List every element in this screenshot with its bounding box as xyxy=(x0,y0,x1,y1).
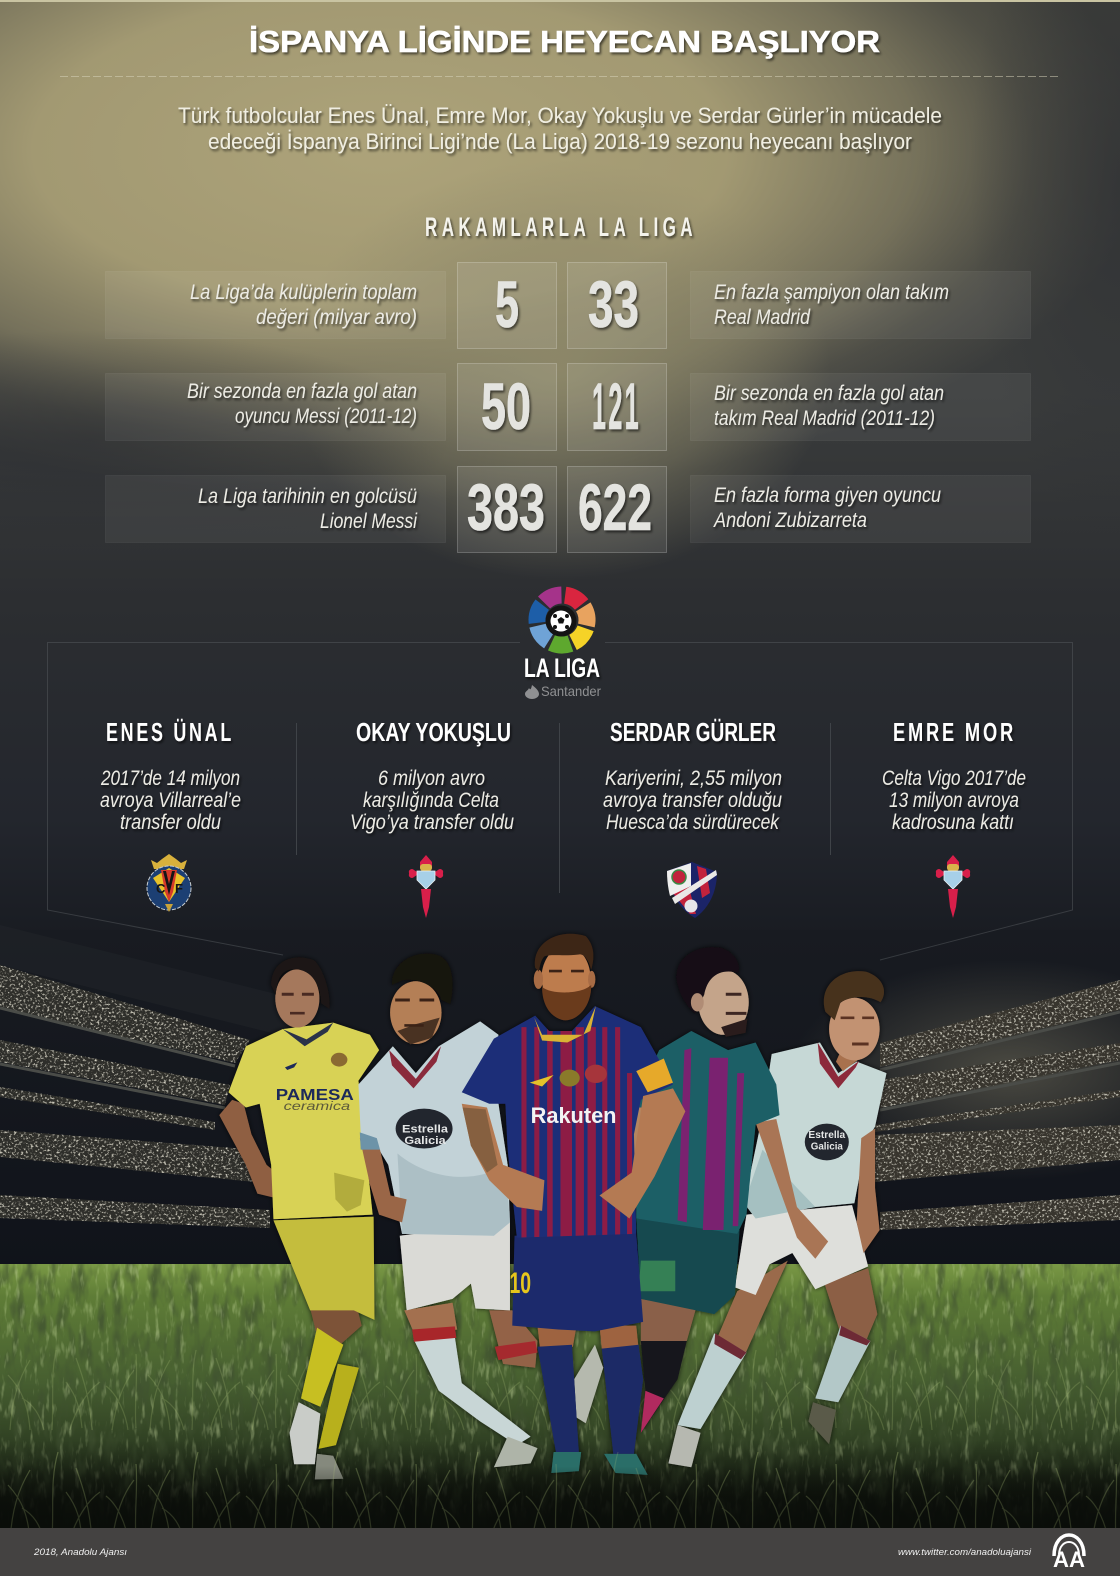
stat: top scorer and appearances: Andoni Zubizarreta xyxy=(712,508,867,532)
footer credit: 2018, Anadolu Ajansı xyxy=(33,1547,127,1558)
player: Okay Yokuşlu xyxy=(358,954,538,1467)
player column: Enes Ünal xyxy=(100,717,241,834)
player column: Serdar Gürler xyxy=(603,717,782,834)
crowd stands right xyxy=(875,980,1120,1230)
player column: Serdar Gürler: Huesca’da sürdürecek xyxy=(606,810,780,834)
player: Okay Yokuşlu: Estrella xyxy=(402,1122,449,1135)
players illustration xyxy=(219,934,887,1480)
player: Enes Ünal: ceramica xyxy=(284,1099,351,1113)
footer bar xyxy=(0,1528,1120,1576)
player column: Okay Yokuşlu: karşılığında Celta xyxy=(363,788,499,812)
player: Lionel Messi xyxy=(462,934,685,1475)
player: Serdar Gürler xyxy=(574,947,780,1433)
section heading: numbers: RAKAMLARLA LA LIGA xyxy=(425,212,697,242)
player: Enes Ünal xyxy=(219,957,379,1480)
stats row 3 xyxy=(106,466,1030,552)
grass field xyxy=(0,1264,1120,1528)
player column: Okay Yokuşlu xyxy=(350,717,514,834)
stat: club value: değeri (milyar avro) xyxy=(256,305,417,329)
player column: Emre Mor xyxy=(882,717,1026,834)
footer link: www.twitter.com/anadoluajansi xyxy=(898,1547,1032,1558)
player column: Emre Mor: EMRE MOR xyxy=(893,717,1016,747)
subtitle: Türk futbolcular Enes Ünal, Emre Mor, Okay Yokuşlu ve Serdar Gürler’in mücadele xyxy=(178,103,942,128)
stat: goals in a season: Bir sezonda en fazla gol atan xyxy=(714,381,944,405)
icon: Villarreal crest xyxy=(147,854,191,912)
stat: goals in a season: 50 xyxy=(481,369,531,443)
stat: club value xyxy=(190,267,949,341)
icon: Villarreal crest: F xyxy=(175,881,183,896)
player column: Serdar Gürler: SERDAR GÜRLER xyxy=(610,717,776,747)
player column: Enes Ünal: transfer oldu xyxy=(120,810,221,834)
La Liga wordmark: LA LIGA xyxy=(524,653,600,683)
icon: Anadolu Agency logo xyxy=(1053,1535,1085,1572)
stat: goals in a season: oyuncu Messi (2011-12) xyxy=(235,404,417,428)
stat: goals in a season: 121 xyxy=(592,369,641,443)
grass over player feet xyxy=(0,1430,1120,1528)
player column: Emre Mor: Celta Vigo 2017’de xyxy=(882,766,1026,790)
stat: top scorer and appearances: En fazla forma giyen oyuncu xyxy=(714,483,941,507)
stats row 2 xyxy=(106,364,1030,450)
stat: top scorer and appearances: 383 xyxy=(467,470,545,544)
player column: Okay Yokuşlu: Vigo’ya transfer oldu xyxy=(350,810,514,834)
player column: Serdar Gürler: Kariyerini, 2,55 milyon xyxy=(605,766,782,790)
stadium background xyxy=(0,925,1120,1270)
stats row 1 xyxy=(106,262,1030,348)
stat: top scorer and appearances xyxy=(198,470,941,544)
icon: Celta Vigo crest (Emre Mor) xyxy=(936,855,970,918)
player column: Emre Mor: 13 milyon avroya xyxy=(889,788,1019,812)
subtitle: edeceği İspanya Birinci Ligi’nde (La Liga) 2018-19 sezonu heyecanı başlıyor xyxy=(208,129,912,154)
player: Enes Ünal: PAMESA xyxy=(276,1085,354,1103)
player column: Enes Ünal: 2017’de 14 milyon xyxy=(100,766,240,790)
stat: goals in a season xyxy=(187,369,944,443)
stat: top scorer and appearances: Lionel Messi xyxy=(320,509,418,533)
player column: Okay Yokuşlu: 6 milyon avro xyxy=(378,766,485,790)
stat: club value: En fazla şampiyon olan takım xyxy=(714,280,949,304)
subtitle xyxy=(178,103,942,154)
player: Emre Mor: Galicia xyxy=(811,1141,844,1152)
player column: Serdar Gürler: avroya transfer olduğu xyxy=(603,788,782,812)
player: Okay Yokuşlu: Galicia xyxy=(404,1134,446,1147)
stat: top scorer and appearances: La Liga tarihinin en golcüsü xyxy=(198,484,417,508)
icon: Villarreal crest: C xyxy=(156,881,166,896)
stat: goals in a season: takım Real Madrid (2011-12) xyxy=(714,406,935,430)
player: Lionel Messi: Rakuten xyxy=(531,1104,616,1128)
icon: Huesca crest xyxy=(667,862,717,918)
icon: La Liga logo xyxy=(527,585,597,655)
stat: club value: 33 xyxy=(588,267,639,341)
player column: Enes Ünal: ENES ÜNAL xyxy=(106,717,234,747)
player column: Emre Mor: kadrosuna kattı xyxy=(892,810,1014,834)
player: Lionel Messi: 10 xyxy=(510,1266,531,1299)
stat: club value: Real Madrid xyxy=(714,305,811,329)
player column: Enes Ünal: avroya Villarreal’e xyxy=(100,788,241,812)
stat: top scorer and appearances: 622 xyxy=(578,470,652,544)
crowd stands left xyxy=(0,965,270,1228)
player: Emre Mor xyxy=(668,971,887,1467)
player: Emre Mor: Estrella xyxy=(808,1130,846,1141)
player column: Okay Yokuşlu: OKAY YOKUŞLU xyxy=(356,717,511,747)
stat: club value: La Liga’da kulüplerin toplam xyxy=(190,280,417,304)
stat: goals in a season: Bir sezonda en fazla gol atan xyxy=(187,379,417,403)
players panel outline xyxy=(48,642,1072,960)
icon: Celta Vigo crest xyxy=(409,855,443,918)
icon: Anadolu Agency logo: AA xyxy=(1053,1547,1085,1572)
La Liga wordmark: Santander xyxy=(541,683,601,699)
stat: club value: 5 xyxy=(495,267,519,341)
La Liga wordmark xyxy=(524,653,601,699)
title: İSPANYA LİGİNDE HEYECAN BAŞLIYOR xyxy=(249,24,880,59)
